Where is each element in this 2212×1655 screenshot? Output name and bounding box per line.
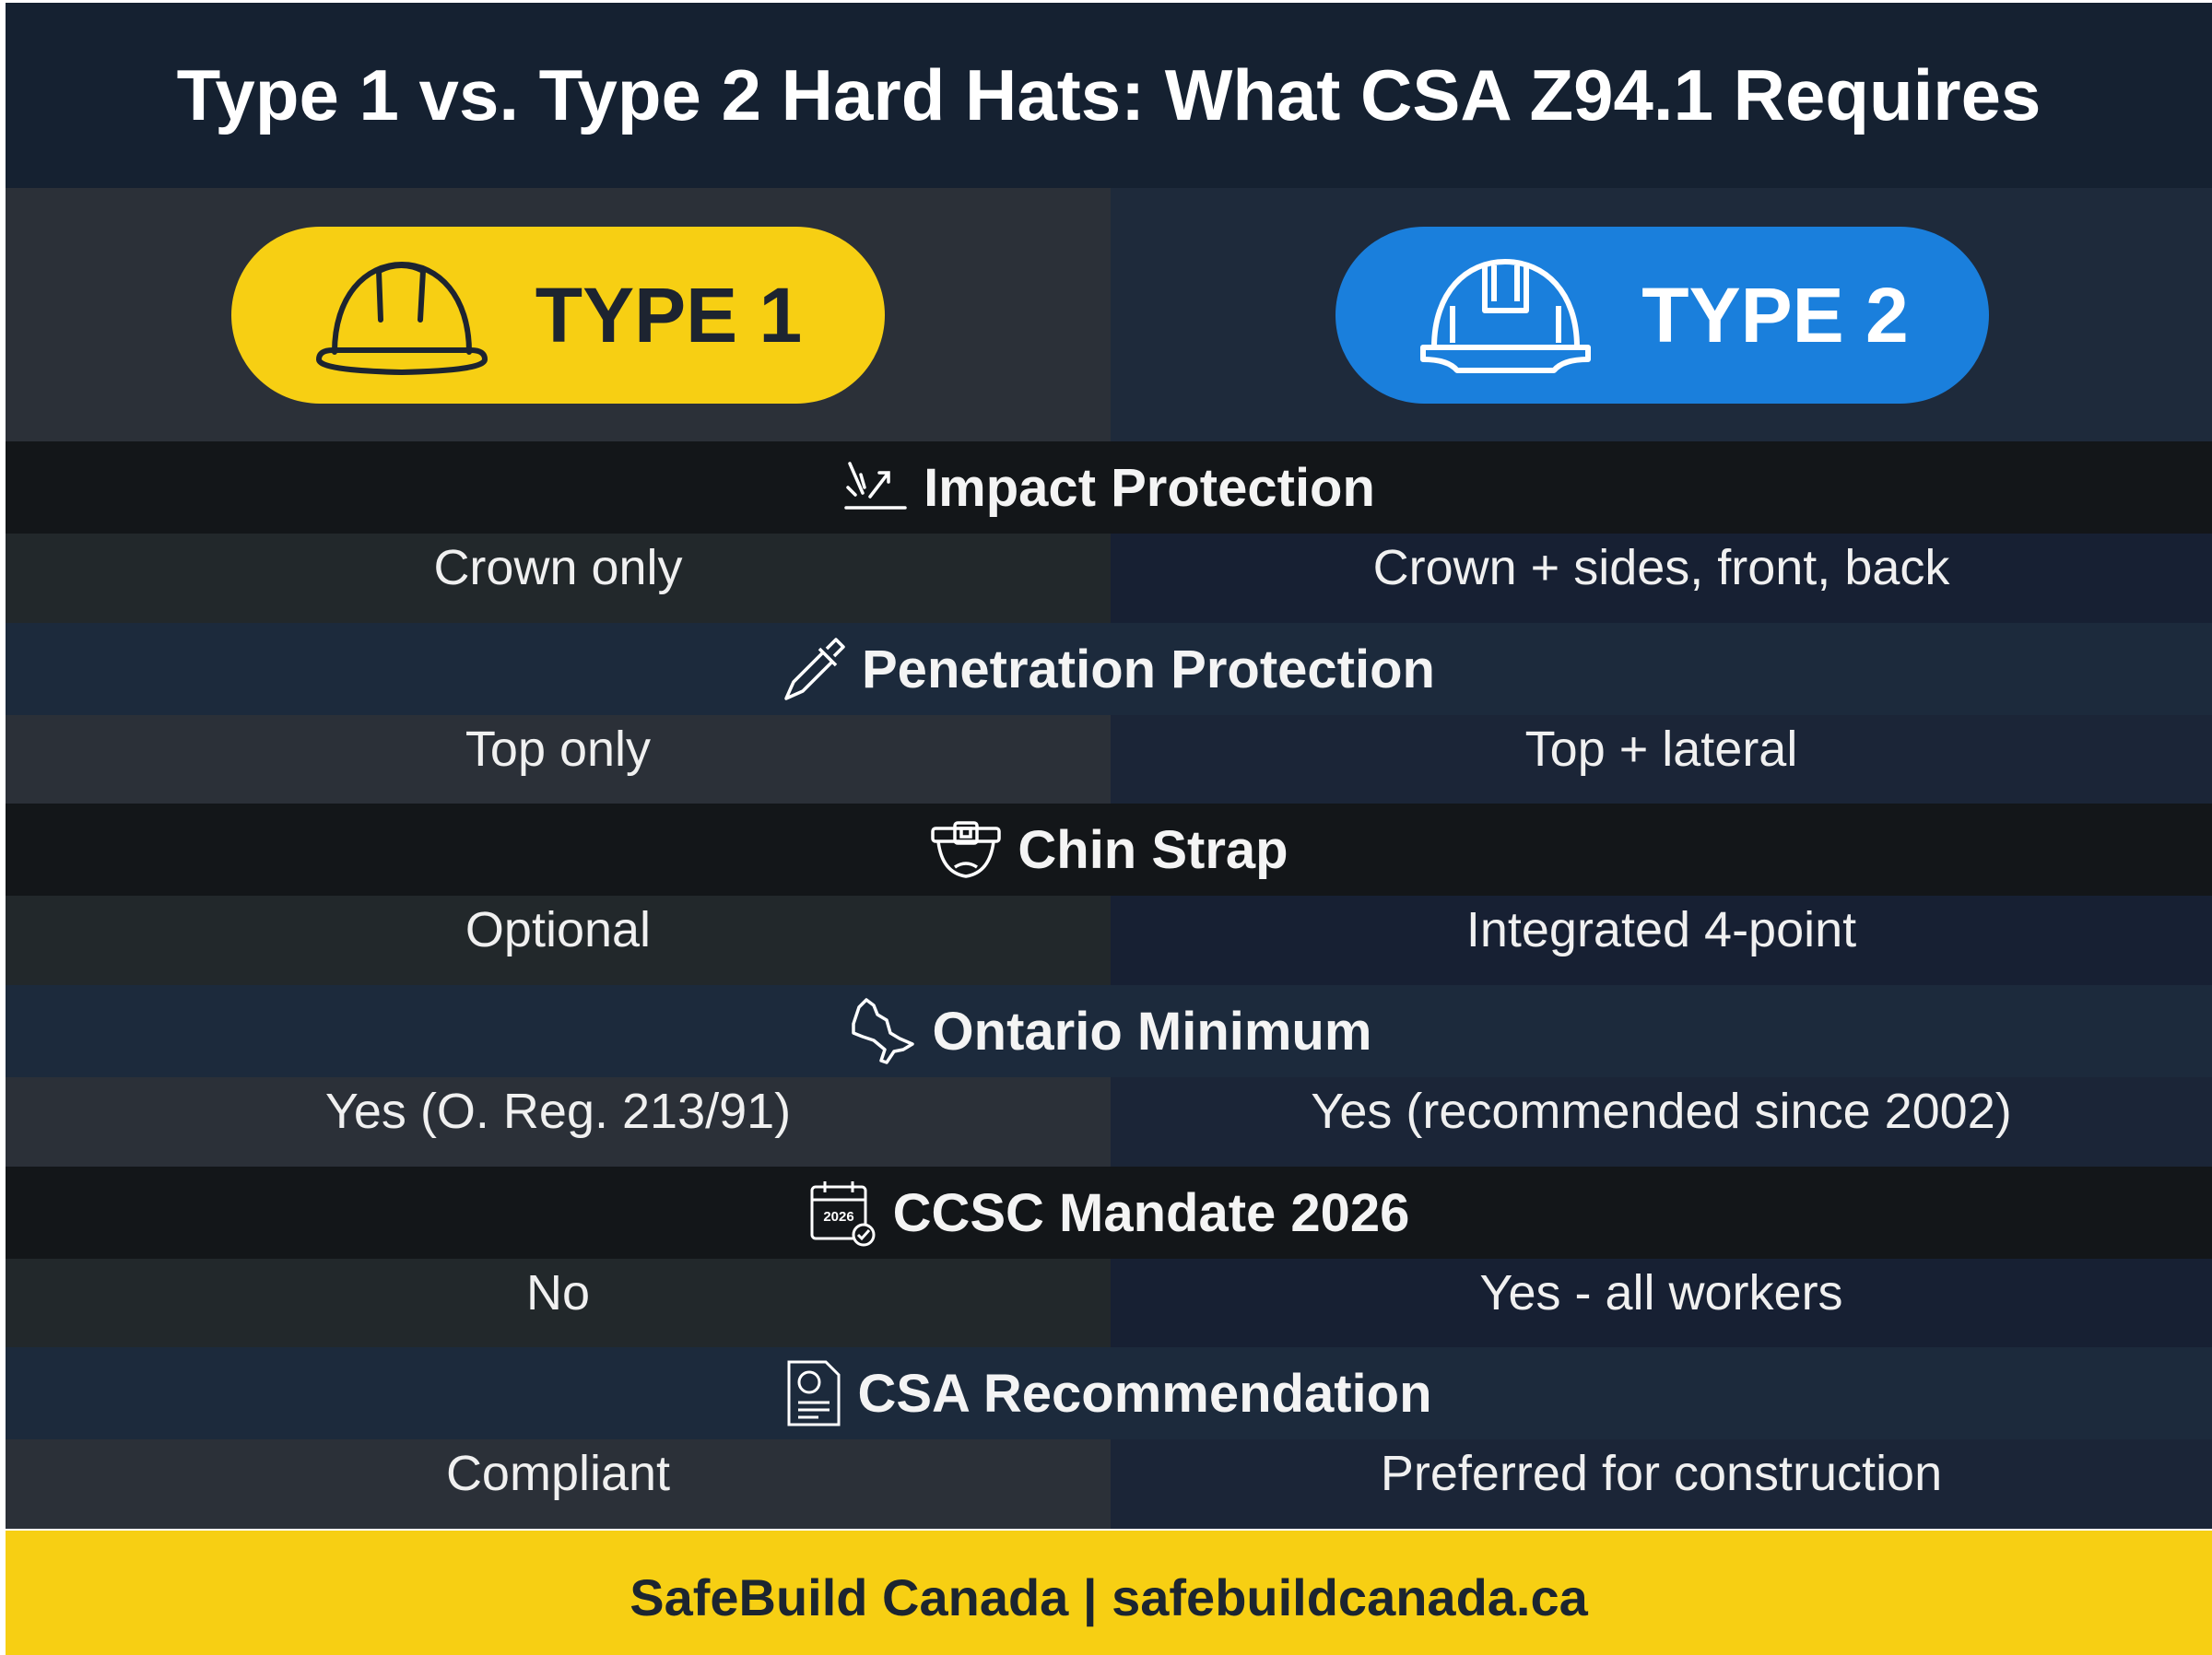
value: type 1 chin strap: Optional [465,901,651,957]
panel: type 2 header [1111,188,2212,441]
heading: penetration protection: Penetration Protection [862,640,1435,698]
value: type 2 chin strap [1111,896,2212,985]
heading: csa recommendation [6,1347,2212,1439]
row: impact protection [6,441,2212,623]
value: type 1 csa [6,1439,1111,1529]
value: type 2 chin strap: Integrated 4-point [1466,901,1856,957]
pill: type 2 [1335,227,1989,404]
pill: type 1 [231,227,885,404]
footer [6,1531,2212,1655]
pill: type 1: TYPE 1 [535,271,802,358]
value: type 1 chin strap [6,896,1111,985]
footer: SafeBuild Canada | safebuildcanada.ca [629,1568,1588,1626]
value: type 1 ontario [6,1077,1111,1167]
heading: impact protection: Impact Protection [924,457,1375,518]
value: type 2 ccsc [1111,1259,2212,1348]
heading: ccsc mandate: 2026 [823,1209,853,1225]
title: Type 1 vs. Type 2 Hard Hats: What CSA Z94.1 Requires [177,54,2041,135]
value: type 1 penetration: Top only [465,721,651,776]
heading: csa recommendation: CSA Recommendation [857,1364,1432,1423]
heading: ccsc mandate [6,1167,2212,1259]
value: type 2 csa [1111,1439,2212,1529]
icon: type 2 helmet [1420,259,1591,373]
heading: penetration protection [6,623,2212,715]
value: type 1 penetration [6,715,1111,804]
value: type 1 ccsc: No [526,1264,590,1320]
icon: type 1 helmet [316,262,488,375]
value: type 1 impact: Crown only [433,540,683,595]
heading: ontario minimum [6,985,2212,1077]
row: ccsc mandate 2026 [6,1167,2212,1347]
row: ontario minimum [6,985,2212,1167]
value: type 2 csa: Preferred for construction [1381,1445,1942,1500]
panel: type 1 header [6,188,1111,441]
value: type 1 ontario: Yes (O. Reg. 213/91) [325,1084,791,1139]
value: type 2 impact: Crown + sides, front, back [1373,540,1949,595]
value: type 2 ontario: Yes (recommended since 2002) [1311,1084,2012,1139]
value: type 2 ccsc: Yes - all workers [1479,1264,1843,1320]
value: type 2 penetration: Top + lateral [1525,721,1797,776]
value: type 1 ccsc [6,1259,1111,1348]
row: chin strap [6,804,2212,985]
value: type 1 impact [6,534,1111,623]
value: type 2 ontario [1111,1077,2212,1167]
value: type 2 impact [1111,534,2212,623]
heading: impact protection [6,441,2212,534]
row: csa recommendation [6,1347,2212,1529]
pill: type 2: TYPE 2 [1641,271,1909,358]
heading: ccsc mandate: CCSC Mandate 2026 [893,1183,1409,1242]
heading: chin strap [6,804,2212,896]
row: penetration protection [6,623,2212,804]
heading: chin strap: Chin Strap [1018,820,1288,879]
value: type 2 penetration [1111,715,2212,804]
heading: ontario minimum: Ontario Minimum [933,1001,1371,1062]
title [6,3,2212,188]
value: type 1 csa: Compliant [446,1445,670,1500]
